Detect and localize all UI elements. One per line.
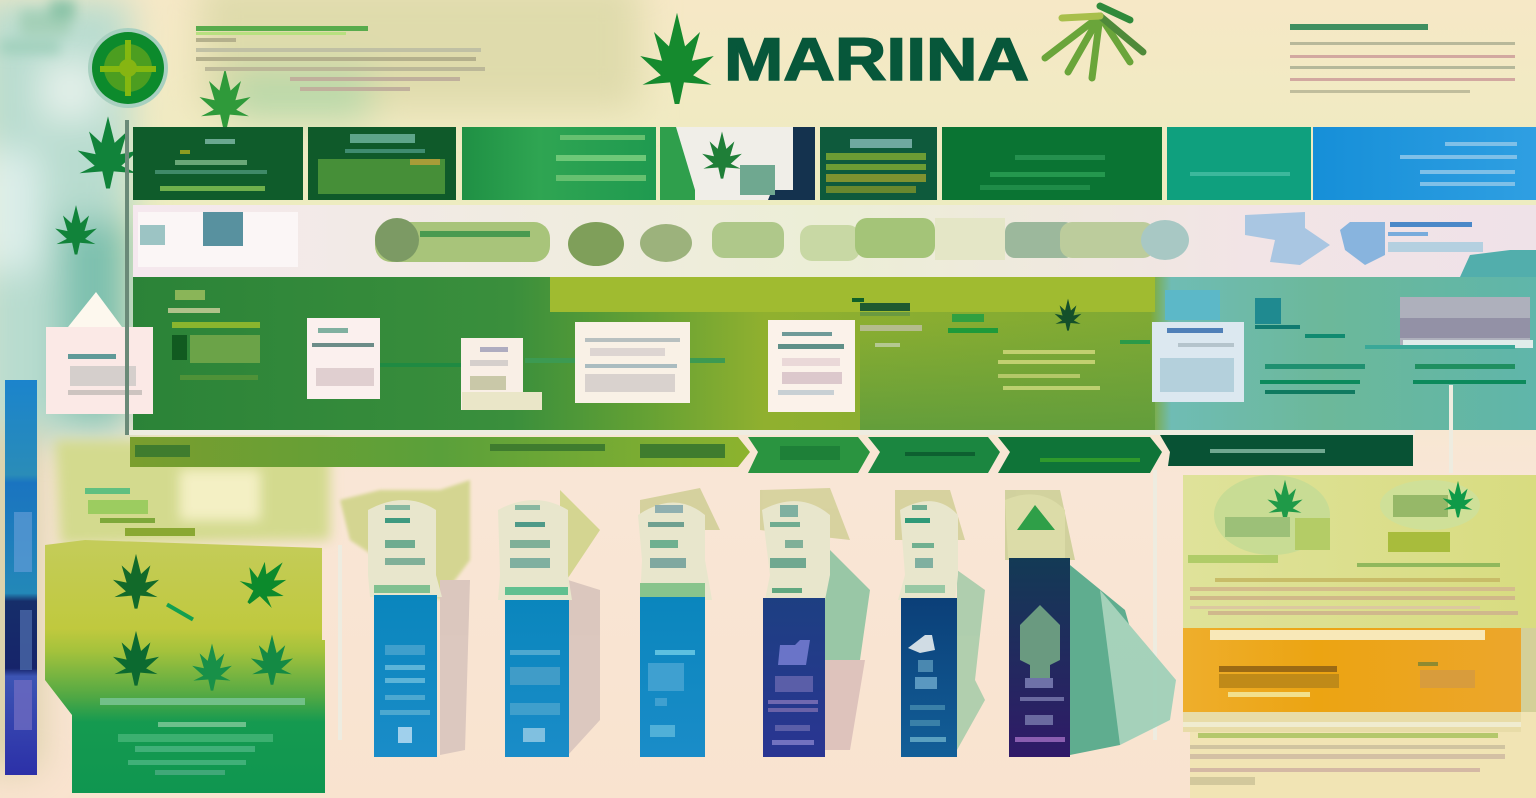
- panel: tab 5: [820, 127, 937, 200]
- panel: bottom right: [1183, 475, 1536, 798]
- left side blue column: [5, 380, 37, 775]
- panel: tab 1: [133, 127, 303, 200]
- top-left text block: [196, 26, 485, 91]
- pale band: [133, 205, 1536, 277]
- column 6: [1005, 494, 1070, 757]
- decorative leaf washes: [340, 480, 1176, 755]
- card 4: [575, 322, 690, 403]
- cloud blobs right: [1245, 212, 1385, 265]
- panel: main band: [46, 277, 1536, 430]
- panel: tab 8: [1313, 127, 1536, 200]
- watercolor wash: top and left: [0, 0, 640, 770]
- panel: tab 6: [942, 127, 1162, 200]
- card 5: [768, 320, 855, 412]
- top-left emblem: [88, 28, 168, 108]
- card 1: [46, 292, 153, 414]
- teal hill: [1460, 250, 1536, 277]
- step 3: [868, 437, 1000, 473]
- column 5: [898, 501, 958, 757]
- arrow process band: [130, 435, 1413, 473]
- step 4: [998, 437, 1162, 473]
- panel: tab 4 with leaf: [660, 127, 815, 200]
- card 2: [307, 318, 380, 399]
- label text group right: [1255, 298, 1526, 394]
- callout: orange panel: [1183, 628, 1521, 712]
- top-right text block: [1290, 24, 1515, 93]
- panel row: header tabs: [133, 127, 1536, 200]
- icon: leaf badge 2: [1380, 480, 1480, 552]
- panel: bottom left leaves: [45, 488, 325, 793]
- column 1: [368, 500, 442, 757]
- tree blobs: [375, 218, 1189, 266]
- bottom right text: [1183, 712, 1536, 798]
- step 5: [1160, 435, 1413, 466]
- column 3: [638, 502, 712, 757]
- icon: teal badge: [203, 212, 243, 246]
- step 1: [130, 437, 750, 467]
- card 6: [1152, 322, 1244, 402]
- icon: leaf badge 1: [1214, 475, 1330, 555]
- column 2: [498, 500, 572, 757]
- panel: vertical columns: [340, 480, 1176, 757]
- panel: tab 2: [308, 127, 456, 200]
- watercolor wash: bottom left: [55, 440, 330, 545]
- block text at left: [168, 290, 260, 380]
- title: MARIINA: [724, 26, 1029, 93]
- card 3: [461, 338, 542, 410]
- panel: tab 3: [462, 127, 656, 200]
- icon: title palm leaf right: [1045, 6, 1143, 78]
- connector lines: [380, 340, 1150, 367]
- label text group mid: [852, 298, 1100, 390]
- step 2: [748, 437, 870, 473]
- icon: leaves left column: [55, 68, 251, 254]
- icon: title leaf left: [640, 13, 714, 104]
- frame lines: [125, 120, 1453, 740]
- column 4: [762, 501, 830, 757]
- panel: tab 7: [1167, 127, 1311, 200]
